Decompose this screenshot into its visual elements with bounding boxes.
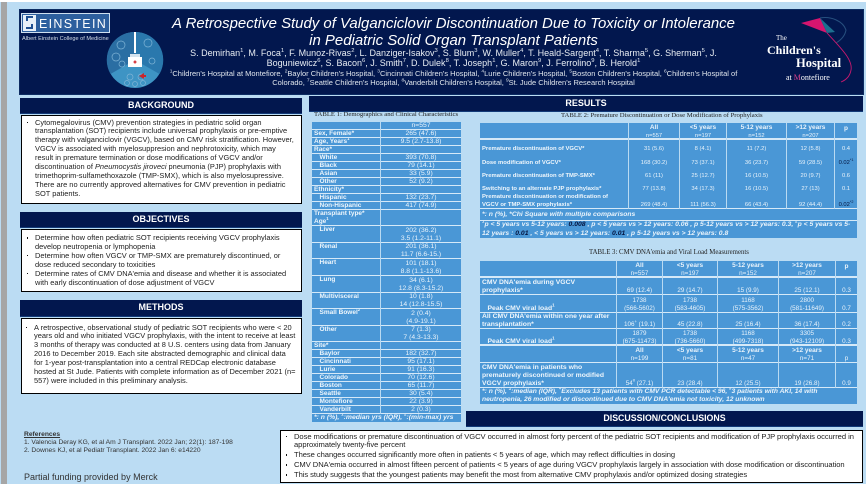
table 1: demographics: 182 (32.7) (406, 350, 436, 357)
table 2: discontinuation: Premature discontinuation of TMP-SMX* (482, 173, 595, 179)
table 1: demographics: 70 (12.6) (407, 374, 435, 381)
table 1: demographics: Seattle (320, 390, 341, 397)
table 3: CMV DNAemia: 1168 (741, 330, 755, 337)
objectives list: develop neutropenia or lymphopenia (35, 242, 155, 251)
table 2: discontinuation: 25 (12.7) (691, 173, 715, 179)
table 1: demographics: 265 (47.6) (406, 130, 436, 137)
table 1: demographics: Age1 (314, 216, 329, 225)
panel: discussion text (280, 430, 863, 482)
table 3: CMV DNAemia: (581-11649) (790, 305, 824, 312)
table 2: discontinuation (480, 123, 857, 238)
table 2: discontinuation: Switching to an alternate PJP prophylaxis* (482, 186, 601, 192)
methods text: A retrospective, observational study of pediatric SOT recipients who were < 20 (34, 322, 292, 332)
table 2: discontinuation: 16 (10.5) (745, 186, 768, 192)
table 2: discontinuation: n=152 (748, 133, 765, 139)
heading: results (309, 96, 863, 112)
table 1: demographics: 417 (74.9) (406, 202, 436, 209)
table 2: discontinuation: Premature discontinuation of VGCV* (482, 146, 584, 152)
table 3: CMV DNAemia: prophylaxis* (482, 287, 523, 294)
table 3: CMV DNAemia: >12 years (792, 262, 822, 269)
table 3: CMV DNAemia: n=47 (741, 355, 755, 362)
methods text: years old and who initiated VGCV prophylaxis, with the intent to receive at least (34, 331, 295, 340)
table 3: CMV DNAemia: Peak CMV viral load1 (488, 336, 555, 345)
table 2: discontinuation: VGCV or TMP-SMX prophylaxis* (482, 202, 572, 208)
table 3: CMV DNAemia: n=207 (798, 270, 816, 277)
table 2: discontinuation: 168 (30.2) (641, 160, 667, 166)
table 1: demographics: Liver (320, 226, 335, 233)
table 1: demographics: 11.7 (6.6-15.) (401, 251, 441, 258)
background text: There are no currently approved alternatives for CMV prevention in pediatric (35, 180, 286, 189)
icon: transplant circle (106, 32, 164, 88)
objectives list: Determine rates of CMV DNA'emia and disease and whether it is associated (35, 269, 286, 278)
table 1: demographics: 9.5 (2.7-13.8) (401, 138, 441, 145)
table 1: demographics: 3.5 (1.2-11.1) (401, 235, 441, 242)
affiliations: 1Children's Hospital at Montefiore, 2Baylor Children's Hospital, 3Cincinnati Children's Hospital, 4Lurie Children's Hospital, 5Boston Children's Hospital, 6Children's Hospital of (170, 68, 737, 78)
table 2: discontinuation: 16 (10.5) (745, 173, 768, 179)
logo: Children's Hospital at Montefiore: The (776, 34, 787, 42)
table 2: discontinuation: *: n (%), *Chi Square with multiple comparisons (482, 211, 635, 218)
background text: trimethoprim-sulfamethoxazole (TMP-SMX), which is also myelosupressive. (35, 171, 284, 180)
table 3: CMV DNAemia: transplantation* (482, 321, 534, 328)
table 3: CMV DNAemia: All CMV DNA'emia within one year after (482, 313, 609, 320)
table 2 caption: TABLE 2: Premature Discontinuation or Dose Modification of Prophylaxis (561, 112, 763, 119)
table 3: CMV DNAemia: CMV DNA'emia in patients who (482, 364, 582, 371)
table 3: CMV DNAemia: 106+ (19.1) (624, 319, 655, 328)
panel: discussion text: CMV DNA'emia occurred in almost fifteen percent of patients < 5 years of age during VGCV prophylaxis largely in association with dose modification or discontinuation (294, 460, 845, 469)
table 3: CMV DNAemia: 2800 (800, 297, 814, 304)
heading: background: BACKGROUND (128, 100, 194, 110)
table 3: CMV DNAemia: (575-3562) (733, 305, 763, 312)
table 1: demographics: 34 (6.1) (409, 277, 433, 284)
panel: discussion text: approximately twenty-five percent (294, 440, 405, 449)
table 1: demographics: 30 (5.4) (409, 390, 433, 397)
table 2: discontinuation: n=207 (802, 133, 819, 139)
table 3: CMV DNAemia: 36 (17.4) (794, 321, 820, 328)
table 1: demographics: Colorado (320, 374, 348, 381)
table 1: demographics: 79 (14.1) (407, 162, 435, 169)
authors: S. Demirhan1, M. Foca1, F. Munoz-Rivas2, L. Danziger-Isakov3, S. Blum3, W. Muller4, T. Heald-Sargent4, T. Sharma5, G. Sherman5, J. (190, 48, 717, 58)
table 3: CMV DNAemia: 23 (28.4) (677, 380, 703, 387)
table 2: discontinuation: 36 (23.7) (745, 160, 768, 166)
table 1: demographics: Hispanic (320, 194, 347, 201)
table 3: CMV DNAemia: 0.3 (842, 287, 851, 294)
table 1: demographics: Vanderbilt (320, 406, 351, 413)
table 2: discontinuation: All (650, 124, 658, 131)
table 3: CMV DNAemia: (675-11473) (623, 338, 656, 345)
background text (21, 115, 302, 204)
table 3 caption: TABLE 3: CMV DNA'emia and Viral Load Measurements (589, 249, 749, 256)
affiliations: Colorado, 7Seattle Children's Hospital, 8Vanderbilt Children's Hospital, 9St. Jude Children's Research Hospital (272, 78, 635, 86)
table 3: CMV DNAemia: 12 (25.5) (735, 380, 761, 387)
logo: Children's Hospital at Montefiore (767, 17, 852, 82)
table 3: CMV DNAemia: n=152 (739, 270, 757, 277)
title: in Pediatric Solid Organ Transplant Patients (309, 32, 598, 49)
table 3: CMV DNAemia: 54# (27.1) (626, 378, 653, 387)
heading: objectives (20, 212, 302, 228)
table 1: demographics: Ethnicity* (314, 186, 344, 193)
table 1: demographics: 33 (5.9) (409, 170, 433, 177)
table 2: discontinuation: 92 (44.4) (799, 202, 822, 208)
table 3: CMV DNAemia: 0.2 (842, 321, 851, 328)
table 3: CMV DNAemia: (736-5660) (675, 338, 705, 345)
table 1: demographics: Heart (320, 259, 336, 266)
table 3: CMV DNAemia: prematurely discontinued or modified (482, 372, 604, 379)
table 3: CMV DNAemia: n=71 (800, 355, 814, 362)
panel: discussion text: Dose modifications or premature discontinuation of VGCV occurred in almost forty percent of the pediatric SOT recipients and modification of PJP prophylaxis occurred in (294, 432, 854, 440)
table 2: discontinuation: >12 years (796, 124, 825, 131)
references (24, 431, 233, 454)
table 1: demographics: Transplant type* (314, 210, 365, 217)
table 3: CMV DNAemia: n=557 (631, 270, 648, 277)
table 1: demographics: Other (320, 178, 337, 185)
background text: transplantation (SOT) recipients include universal prophylaxis or pre-emptive (35, 126, 287, 135)
table 2: discontinuation: 269 (48.4) (641, 202, 667, 208)
table 3: CMV DNAemia: 1879 (632, 330, 646, 337)
table 2: discontinuation: Dose modification of VGCV* (482, 160, 561, 166)
table 3: CMV DNAemia: 15 (9.9) (737, 287, 759, 294)
funding note: Partial funding provided by Merck (24, 472, 158, 482)
table 3: CMV DNAemia: 0.7 (842, 305, 851, 312)
table 1: demographics: 2 (0.3) (411, 406, 431, 413)
table 1: demographics: 52 (9.2) (409, 178, 433, 185)
logo: Einstein: Albert Einstein College of Medicine (22, 36, 109, 42)
table 2: discontinuation: 59 (28.5) (799, 160, 822, 166)
panel: discussion text: This study suggests that the youngest patients may benefit the most from alternative CMV prophylaxis and/or optimized dosing strategies (294, 470, 747, 479)
table 1: demographics: 65 (11.7) (408, 382, 434, 389)
table 3: CMV DNAemia: n=199 (631, 355, 648, 362)
table 1: demographics: Montefiore (320, 398, 353, 405)
table 1: demographics: 22 (3.9) (409, 398, 433, 405)
table 3: CMV DNAemia: neutropenia, 26 modified or discontinued due to CMV DNA'emia not toxicity, 12 unknown (482, 396, 765, 403)
objectives list: Determine how often pediatric SOT recipients receiving VGCV prophylaxis (35, 233, 280, 242)
table 3: CMV DNAemia: 29 (14.7) (677, 287, 703, 294)
table 1: demographics: (4.9-19.1) (406, 318, 436, 325)
logo: Einstein (21, 13, 110, 42)
logo: Einstein: EINSTEIN (39, 16, 107, 30)
table 1: demographics: 7 (4.3-13.3) (403, 334, 439, 341)
table 3: CMV DNAemia: 45 (22.8) (677, 321, 703, 328)
table 3: CMV DNAemia (480, 261, 857, 404)
table 1: demographics: Non-Hispanic (320, 202, 361, 209)
table 2: discontinuation: Premature discontinuation or modification of (482, 194, 608, 200)
table 3: CMV DNAemia: (499-7318) (733, 338, 763, 345)
methods text: hosted at St Jude. Patients with complete information as of December 2021 (n= (34, 367, 296, 376)
background text: therapy with valganciclovir (VGCV), based on CMV risk stratification. However, (35, 135, 294, 144)
table 2: discontinuation: 34 (17.3) (691, 186, 715, 192)
methods text: 557) were included in this preliminary analysis. (34, 376, 188, 385)
table 1 caption: TABLE 1: Demographics and Clinical Characteristics (314, 111, 458, 118)
table 3: CMV DNAemia: VGCV prophylaxis* (482, 380, 544, 387)
table 3: CMV DNAemia: 5-12 years (732, 262, 764, 269)
table 1: demographics: 202 (36.2) (406, 227, 436, 234)
methods text: 3 months of therapy was conducted at 8 U.S. centers using data from January (34, 340, 291, 349)
table 1: demographics: n=557 (411, 122, 431, 129)
authors (190, 48, 717, 68)
methods text (21, 318, 302, 394)
table 1: demographics: Site* (314, 342, 328, 349)
table 2: discontinuation: n=197 (695, 133, 711, 139)
table 3: CMV DNAemia: (583-4605) (675, 305, 705, 312)
table 3: CMV DNAemia: 1738 (683, 330, 697, 337)
table 2: discontinuation: <5 years (690, 124, 716, 131)
table 2: discontinuation: 77 (13.8) (642, 186, 666, 192)
table 1: demographics: Renal (320, 243, 337, 250)
heading: discussion (466, 411, 863, 427)
objectives list: with early discontinuation of dose adjustment of VGCV (35, 278, 214, 287)
table 1: demographics: Lung (320, 276, 335, 283)
background text: SOT patients. (35, 189, 80, 198)
table 1: demographics: 95 (17.1) (407, 358, 435, 365)
table 1: demographics: Sex, Female* (314, 130, 354, 137)
table 1: demographics: Other (320, 326, 337, 333)
table 1: demographics: 91 (16.3) (407, 366, 435, 373)
heading: results: RESULTS (565, 98, 607, 108)
heading: methods (20, 300, 302, 317)
panel: background (20, 98, 302, 204)
background text: result in premature termination or dose modifications of VGCV and/or (35, 153, 263, 162)
objectives list: Determine how often VGCV or TMP-SMX are prematurely discontinued, or (35, 251, 280, 260)
heading: discussion: DISCUSSION/CONCLUSIONS (603, 413, 726, 423)
table 3: CMV DNAemia: p (845, 355, 848, 362)
table 2: discontinuation: 27 (13) (801, 186, 820, 192)
table 2: discontinuation: 8 (4.1) (695, 146, 711, 152)
references: References (24, 431, 60, 438)
table 3: CMV DNAemia: (566-5602) (624, 305, 655, 312)
title (171, 14, 735, 49)
table 3: CMV DNAemia: 1738 (683, 297, 697, 304)
heading: methods: METHODS (138, 302, 184, 312)
table 3: CMV DNAemia: 25 (12.1) (794, 287, 820, 294)
table 3: CMV DNAemia: >12 years (792, 347, 822, 354)
table 1: demographics: 201 (36.1) (406, 243, 436, 250)
panel: discussion text: These changes occurred significantly more often in patients < 5 years of age, which may reflect difficulties in dosing (294, 450, 675, 459)
table 1: demographics: 7 (1.3) (411, 326, 431, 333)
table 2: discontinuation: n=557 (646, 133, 662, 139)
table 2: discontinuation: 0.02*1 (839, 158, 853, 166)
table 2: discontinuation: 5-12 years (741, 124, 772, 131)
background text: VGCV is associated with myelosuppresion and nephrotoxicity, which may (35, 144, 276, 153)
methods text: 2016 to December 2019. Each site abstracted demographic and clinical data (34, 349, 286, 358)
table 1: demographics: 10 (1.8) (409, 293, 433, 300)
table 2: discontinuation: 61 (11) (645, 173, 663, 179)
background text: discontinuation of Pneumocystis jiroveci pneumonia (PJP) prophylaxis with (35, 162, 281, 171)
panel: methods (20, 300, 302, 394)
objectives list (21, 229, 302, 292)
header banner (20, 10, 863, 94)
references: 1. Valencia Deray KG, et al Am J Transplant. 2022 Jan; 22(1): 187-198 (24, 439, 233, 446)
table 3: CMV DNAemia: 1738 (632, 297, 646, 304)
table 1: demographics: Asian (320, 170, 337, 177)
table 2: discontinuation: 0.4 (842, 146, 850, 152)
table 3: CMV DNAemia: 5-12 years (732, 347, 764, 354)
table 3: CMV DNAemia: All (635, 347, 644, 354)
table 1: demographics: 101 (18.1) (406, 260, 436, 267)
table 1: demographics: 2 (0.4) (411, 310, 431, 317)
table 3: CMV DNAemia: n=81 (683, 355, 697, 362)
table 3: CMV DNAemia: n=197 (681, 270, 699, 277)
table 3: CMV DNAemia: 19 (26.8) (794, 380, 820, 387)
table 1: demographics (312, 122, 461, 422)
references: 2. Downes KJ, et al Pediatr Transplant. 2022 Jan 6: e14220 (24, 447, 201, 454)
logo: Children's Hospital at Montefiore: Children's (767, 43, 821, 57)
table 1: demographics: Baylor (320, 350, 340, 357)
table 2: discontinuation: 11 (7.2) (747, 146, 766, 152)
table 3: CMV DNAemia: 1168 (741, 297, 755, 304)
methods text: for 1-year post-transplantation into a central REDCap electronic database (34, 358, 276, 367)
table 3: CMV DNAemia: 0.3 (842, 338, 851, 345)
affiliations (170, 68, 738, 86)
table 1: demographics: Boston (320, 382, 342, 389)
table 2: discontinuation: 0.1 (842, 186, 850, 192)
table 3: CMV DNAemia: CMV DNA'emia during VGCV (482, 279, 575, 286)
table 1: demographics: Lurie (320, 366, 335, 373)
panel: objectives (20, 212, 302, 292)
logo: Children's Hospital at Montefiore: at Montefiore (786, 73, 830, 82)
table 3: CMV DNAemia: Peak CMV viral load1 (488, 303, 555, 312)
table 1: demographics: 132 (23.7) (406, 194, 436, 201)
table 1: demographics: Cincinnati (320, 358, 351, 365)
table 1: demographics: Multivisceral (320, 293, 359, 300)
table 2: discontinuation: 12 (5.8) (800, 146, 820, 152)
table 3: CMV DNAemia: 25 (16.4) (735, 321, 761, 328)
table 1: demographics: Race* (314, 146, 332, 153)
table 2: discontinuation: 66 (43.4) (745, 202, 768, 208)
table 2: discontinuation: 0.6 (842, 173, 850, 179)
table 2: discontinuation: p (844, 125, 848, 132)
title: A Retrospective Study of Valganciclovir Discontinuation Due to Toxicity or Intolerance (172, 14, 735, 32)
table 1: demographics: 12.8 (8.3-15.2) (399, 285, 443, 292)
heading: background (20, 98, 302, 114)
table 3: CMV DNAemia: p (844, 263, 848, 270)
heading: objectives: OBJECTIVES (132, 214, 190, 224)
table 2: discontinuation: 111 (56.3) (690, 202, 716, 208)
table 1: demographics: White (320, 154, 337, 161)
table 1: demographics: 14 (12.8-15.5) (400, 301, 442, 308)
table 2: discontinuation: 20 (9.7) (800, 173, 820, 179)
table 3: CMV DNAemia: <5 years (677, 347, 703, 354)
table 3: CMV DNAemia: 0.9 (842, 380, 851, 387)
table 2: discontinuation: 0.02*2 (839, 200, 853, 208)
table 1: demographics: 393 (70.8) (406, 154, 436, 161)
table 3: CMV DNAemia: <5 years (677, 262, 703, 269)
table 3: CMV DNAemia: (943-12109) (790, 338, 824, 345)
authors: Boguniewicz6, S. Bacon6, J. Smith7, D. Dulek8, T. Joseph1, G. Maron9, J. Ferrolino9, B. Herold1 (267, 58, 640, 68)
table 3: CMV DNAemia: 3305 (800, 330, 814, 337)
table 1: demographics: Black (320, 162, 337, 169)
background text: Cytomegalovirus (CMV) prevention strategies in pediatric solid organ (35, 118, 262, 126)
table 3: CMV DNAemia: All (635, 262, 644, 269)
table 2: discontinuation: 12 years : 0.01 , < 5 years vs > 12 years: 0.01 , p 5-12 years vs > 12 years: 0.8 (482, 230, 728, 236)
table 2: discontinuation: 31 (5.6) (644, 146, 664, 152)
objectives list: dose reduced secondary to toxicities (35, 260, 155, 269)
table 2: discontinuation: 73 (37.1) (691, 160, 715, 166)
table 3: CMV DNAemia: 69 (12.4) (627, 287, 652, 294)
table 1: demographics: 8.8 (1.1-13.6) (401, 268, 441, 275)
logo: Children's Hospital at Montefiore: Hospital (796, 56, 841, 70)
